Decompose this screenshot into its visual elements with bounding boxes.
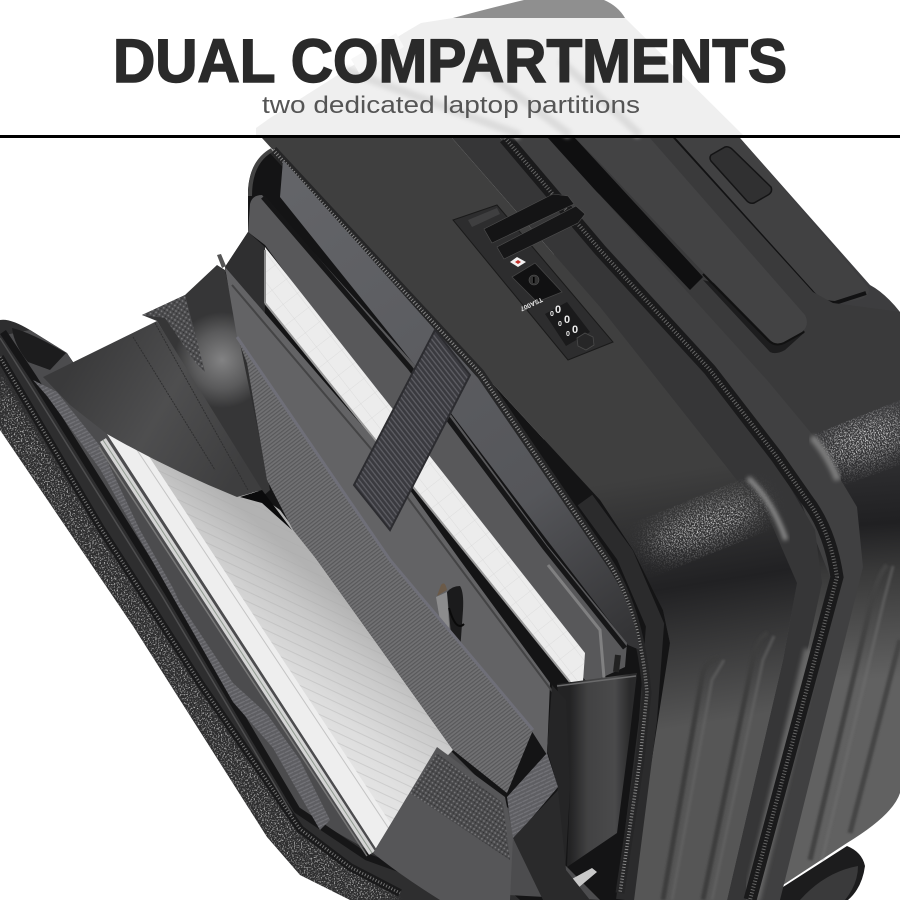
TSA key lock <box>512 263 562 312</box>
rim lower highlight <box>752 650 812 900</box>
laptop light edge <box>548 565 604 678</box>
front face ribs <box>663 633 774 900</box>
right fabric pocket <box>547 673 637 875</box>
handle slot <box>540 138 703 290</box>
right velcro flap <box>507 753 558 840</box>
metal buckle <box>570 868 597 888</box>
notebook page edges <box>103 440 372 853</box>
wedge behind pocket <box>225 232 265 470</box>
laptop <box>248 195 627 680</box>
mesh pocket <box>237 337 533 793</box>
TSA badge icon <box>510 257 526 267</box>
front face shell <box>262 138 797 900</box>
combination dials: 0 <box>550 311 554 318</box>
faded zipper stripes <box>345 60 640 135</box>
lid top rim inner <box>12 328 66 370</box>
brand stamp <box>468 208 500 227</box>
velcro tab <box>142 295 205 372</box>
zone around handle <box>548 138 900 440</box>
back fabric pocket <box>142 254 270 497</box>
top band button <box>710 147 772 203</box>
wheel <box>770 846 865 900</box>
laptop dark seam <box>263 197 625 648</box>
zipper tape <box>585 500 655 900</box>
highlight on front face rim <box>748 478 786 540</box>
combination dials: 0 <box>564 314 570 326</box>
top carry band <box>673 138 869 303</box>
lower notebook <box>98 434 453 856</box>
TSA lock plate <box>453 194 613 360</box>
compartment rim <box>250 150 272 196</box>
open lid shell <box>0 320 600 900</box>
lower fabric strip <box>513 790 590 900</box>
rim highlight <box>812 437 838 480</box>
reset button <box>577 333 594 350</box>
main zipper <box>505 138 837 900</box>
rear shell ribs <box>810 565 900 860</box>
strap <box>354 330 470 530</box>
combination dials: 0 <box>572 324 578 336</box>
subtitle: two dedicated laptop partitions <box>262 92 640 119</box>
TSA key lock: TSA007 <box>519 296 544 312</box>
combination dials <box>545 302 590 346</box>
faded suitcase behind header <box>256 0 743 135</box>
bottom flap velcro <box>410 753 510 860</box>
notebook margin <box>107 420 395 850</box>
left zipper rim <box>452 138 822 900</box>
grey organizer panel <box>225 267 550 755</box>
sparkle on front face <box>643 486 767 564</box>
right zipper rim <box>500 138 863 900</box>
lid zipper <box>0 357 400 893</box>
header white band <box>0 0 900 135</box>
pen holder pens <box>436 583 464 652</box>
upper notebook <box>265 247 585 682</box>
gusset shadow <box>240 490 292 530</box>
suitcase rear shell <box>520 138 900 900</box>
combination dials: 0 <box>555 304 561 316</box>
bottom flap <box>373 747 513 900</box>
faded top of suitcase <box>453 0 625 18</box>
zipper pull two <box>497 206 585 259</box>
front flap pocket <box>43 321 262 497</box>
lid texture <box>0 375 400 900</box>
interior cavity <box>225 150 670 900</box>
sparkle on rear shell <box>810 402 900 478</box>
header rule <box>0 135 900 138</box>
lid rim <box>3 332 500 900</box>
panel seam <box>232 285 555 695</box>
lid floor <box>5 330 600 900</box>
compartment zipper <box>273 150 647 893</box>
combination dials: 0 <box>566 331 570 338</box>
lid mesh binding <box>33 380 330 830</box>
zipper pull one <box>484 194 574 243</box>
back panel <box>280 160 640 650</box>
combination dials: 0 <box>558 321 562 328</box>
title: DUAL COMPARTMENTS <box>113 27 787 95</box>
carry handle <box>575 138 807 353</box>
